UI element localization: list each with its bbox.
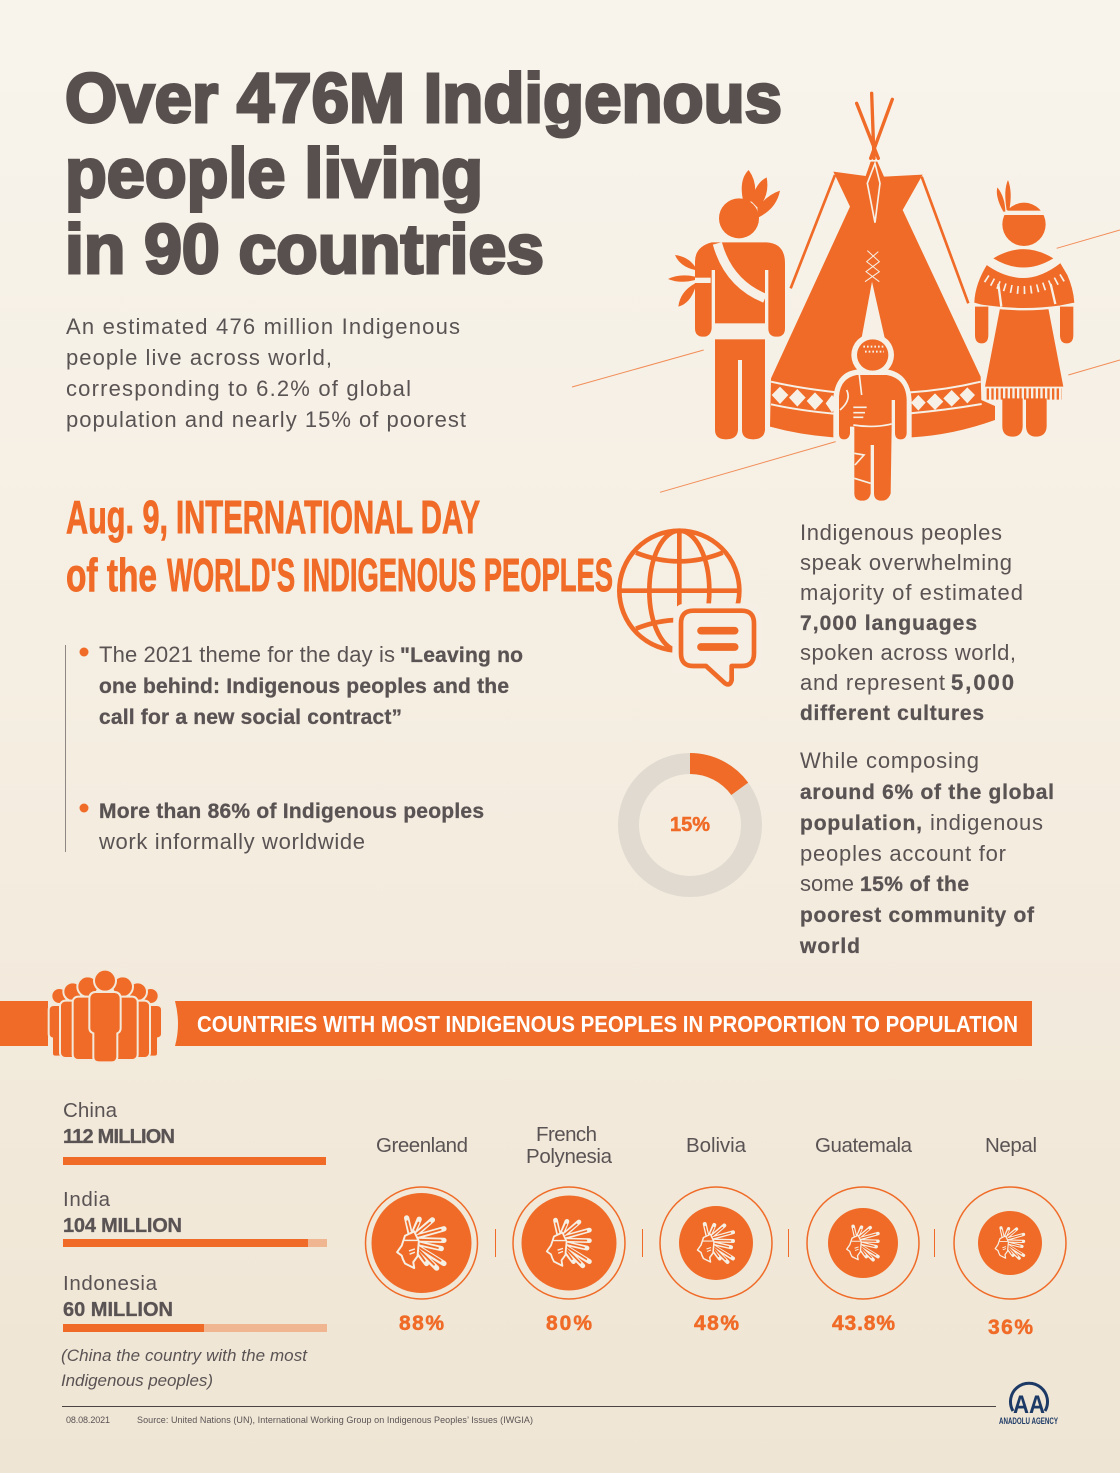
title: people living (65, 134, 483, 212)
footer: date and source: 08.08.2021 (66, 1415, 110, 1425)
bullet: informal work (80, 800, 484, 854)
illustration: teepee and indigenous family (572, 93, 1120, 501)
icon: crowd of people (49, 970, 162, 1062)
column: Bolivia: Bolivia (686, 1134, 747, 1157)
column: Greenland: 88% (399, 1312, 444, 1335)
bullet: 2021 theme: one behind: Indigenous peoples and the (99, 675, 509, 698)
bar: China (63, 1099, 326, 1165)
languages text: Indigenous peoples (800, 520, 1002, 545)
panel: theme and informal work (66, 642, 523, 854)
bar: India: 104 MILLION (63, 1215, 182, 1237)
column: Guatemala (807, 1134, 919, 1335)
population text: peoples account for (800, 841, 1006, 866)
bar: Indonesia: 60 MILLION (63, 1299, 173, 1321)
column: French Polynesia: French (536, 1123, 597, 1146)
column: Nepal: Nepal (985, 1134, 1037, 1157)
note: China: (China the country with the most (61, 1346, 308, 1365)
logo: Anadolu Agency: ANADOLU AGENCY (999, 1416, 1058, 1426)
column: French Polynesia: Polynesia (526, 1145, 613, 1168)
logo: Anadolu Agency (999, 1383, 1058, 1426)
population text: world (799, 935, 860, 958)
population text: 15% of the (860, 873, 969, 896)
population text: population, (800, 812, 922, 835)
languages text: majority of estimated (800, 580, 1023, 605)
title (65, 59, 782, 288)
languages text: different cultures (800, 702, 984, 725)
column: Nepal (954, 1134, 1066, 1339)
title: Over 476M Indigenous (65, 59, 782, 137)
footer: date and source: Source: United Nations (UN), International Working Group on Indigenous Peoples’ Issues (IWGIA) (137, 1415, 533, 1425)
note: China: Indigenous peoples) (61, 1371, 213, 1390)
banner: countries heading (0, 1001, 1032, 1046)
note: China (61, 1346, 308, 1390)
icon: teepee (770, 93, 995, 437)
bullet: 2021 theme: call for a new social contract” (99, 706, 402, 729)
bar chart: total population (63, 1099, 327, 1332)
bullet: 2021 theme: The 2021 theme for the day is (99, 642, 395, 667)
heading: international day (66, 491, 613, 601)
bar: India: India (63, 1188, 111, 1211)
bullet: 2021 theme (80, 642, 523, 729)
heading: international day: of the (66, 549, 157, 601)
population text: poorest community of (800, 904, 1035, 927)
languages text: speak overwhelming (800, 550, 1012, 575)
population text: While composing (800, 748, 979, 773)
bar: China: China (63, 1099, 118, 1122)
heading: international day: Aug. 9, (66, 491, 168, 543)
icon: child (833, 334, 912, 501)
heading: international day: WORLD'S INDIGENOUS PEOPLES (167, 549, 613, 601)
bar: India (63, 1188, 327, 1247)
bar: China: 112 MILLION (63, 1126, 175, 1148)
column: Guatemala: Guatemala (815, 1134, 913, 1157)
icon: man with feathers (668, 170, 785, 439)
population text: around 6% of the global (800, 781, 1054, 804)
icon: globe with speech bubble (619, 531, 762, 684)
banner: countries heading: COUNTRIES WITH MOST INDIGENOUS PEOPLES IN PROPORTION TO POPULATION (197, 1011, 1018, 1037)
icon: woman with headband (974, 180, 1074, 437)
logo: Anadolu Agency: AA (1013, 1391, 1045, 1419)
column: French Polynesia (513, 1123, 625, 1335)
bar: Indonesia: Indonesia (63, 1272, 158, 1295)
column: Bolivia: 48% (694, 1312, 739, 1335)
bar: Indonesia (63, 1272, 327, 1332)
languages text: and represent (800, 670, 945, 695)
column: Guatemala: 43.8% (832, 1312, 895, 1335)
donut chart: 15% (628, 753, 752, 886)
column: Greenland: Greenland (376, 1134, 468, 1157)
intro text (66, 314, 466, 432)
heading: international day: INTERNATIONAL DAY (176, 491, 480, 543)
column: Nepal: 36% (988, 1316, 1033, 1339)
intro text: An estimated 476 million Indigenous (66, 314, 460, 339)
languages text: 5,000 (951, 670, 1014, 695)
intro text: people live across world, (66, 345, 332, 370)
donut chart: 15%: 15% (670, 814, 710, 836)
intro text: corresponding to 6.2% of global (66, 376, 411, 401)
column: Greenland (366, 1134, 478, 1335)
column: French Polynesia: 80% (546, 1312, 592, 1335)
intro text: population and nearly 15% of poorest (66, 407, 466, 432)
languages text: spoken across world, (800, 640, 1016, 665)
population text: some (800, 871, 854, 896)
population text: indigenous (930, 810, 1043, 835)
languages text (800, 520, 1023, 725)
bullet: informal work: work informally worldwide (98, 829, 365, 854)
footer: date and source (62, 1406, 996, 1425)
title: in 90 countries (65, 210, 544, 288)
languages text: 7,000 languages (800, 612, 977, 635)
bullet: 2021 theme: "Leaving no (400, 644, 523, 667)
population text (799, 748, 1054, 958)
column: Bolivia (660, 1134, 772, 1335)
bullet: informal work: More than 86% of Indigenous peoples (99, 800, 484, 823)
